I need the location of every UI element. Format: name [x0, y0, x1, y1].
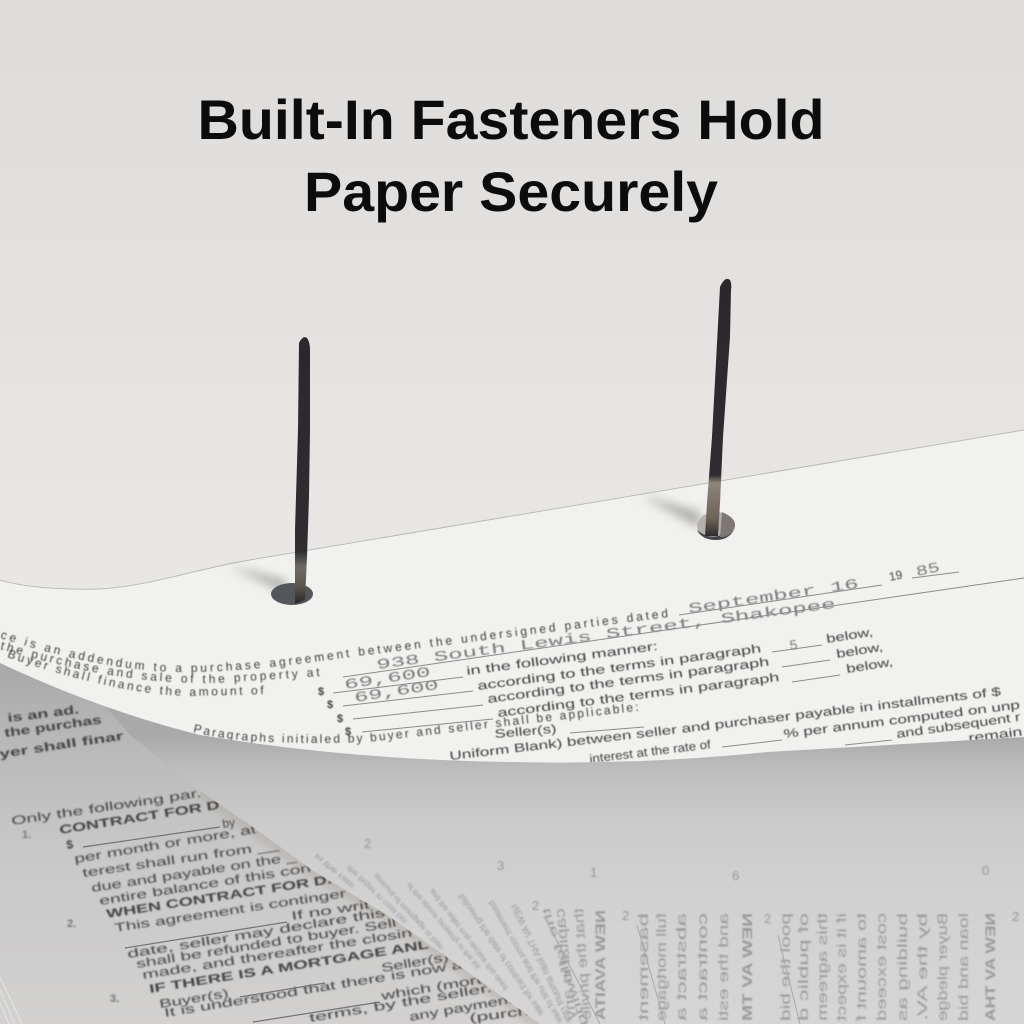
- hole: [271, 583, 313, 605]
- lower left page text: CONTRACT FOR D: [58, 798, 221, 837]
- show-through mirrored text: contract a: [694, 913, 710, 1021]
- printed form text: Seller(s): [494, 722, 557, 741]
- printed form text: the purchase and sale of the property at: [0, 641, 320, 685]
- printed form text: in the following manner:: [466, 639, 659, 678]
- lower left page text: yer shall finar: [0, 729, 125, 761]
- typewriter entries: 85: [915, 560, 942, 581]
- title: Built-In Fasteners Hold: [198, 88, 824, 151]
- show-through mirrored text: following the date of contract for sale: [456, 892, 546, 1018]
- printed form text: ce is an addendum to a purchase agreement between the undersigned parties dated: [0, 608, 668, 675]
- title: Paper Securely: [304, 160, 718, 223]
- show-through mirrored text: in the rate: [313, 851, 357, 891]
- top sheet of paper: [0, 430, 1024, 763]
- fastener right: [640, 279, 735, 540]
- show-through mirrored text: amount of mortgage is loan: [372, 872, 445, 952]
- printed form text: remain: [968, 725, 1023, 745]
- lower left page text: IF THERE IS A MORTGAGE ANL: [148, 937, 430, 996]
- show-through mirrored text: and the seller may declare this deed: [427, 887, 510, 992]
- lower left page text: by: [221, 815, 236, 831]
- lower left page text: Buyer(s): [158, 986, 230, 1011]
- lower left page text: entire balance of this con: [98, 861, 312, 908]
- show-through mirrored text: abstract a: [673, 913, 689, 1021]
- show-through mirrored text: NEW AV TM: [739, 913, 755, 1021]
- show-through mirrored text: [313, 851, 998, 1024]
- show-through page numbers: [364, 836, 1019, 926]
- printed form text: according to the terms in paragraph: [497, 670, 780, 720]
- show-through page numbers: 2: [364, 836, 371, 851]
- lower left page text: WHEN CONTRACT FOR D.: [105, 872, 333, 921]
- curled sheet underside: [0, 640, 1024, 1024]
- typewriter entries: 69,600: [343, 665, 432, 694]
- printed form text: according to the terms in paragraph: [487, 655, 770, 706]
- show-through page numbers: 1: [590, 865, 597, 880]
- show-through page numbers: 0: [982, 863, 989, 878]
- printed form text: Uniform Blank) between seller and purchaser payable in installments of $: [449, 684, 1002, 763]
- show-through mirrored text: of public d: [795, 913, 811, 1021]
- show-through mirrored text: and the esti: [715, 913, 731, 1021]
- lower left page text: It is understood that there is now a: [163, 957, 464, 1020]
- lower left page text: This agreement is continger: [113, 886, 347, 935]
- pin: [295, 337, 310, 604]
- printed form text: $: [337, 713, 343, 725]
- lower left page text: is an ad.: [7, 702, 80, 725]
- show-through mirrored text: building as: [894, 913, 910, 1021]
- lower left page text: 1.: [22, 829, 31, 841]
- show-through mirrored text: of the above property in the lot: [405, 881, 483, 971]
- show-through mirrored text: that the privile: [570, 908, 594, 1021]
- show-through mirrored text: NEW AV THA: [982, 913, 998, 1021]
- show-through mirrored text: cost exceed: [873, 913, 889, 1021]
- show-through mirrored text: pool the bid: [777, 913, 793, 1021]
- form rule lines: [333, 572, 1024, 747]
- rule lines through underside: [545, 918, 800, 1024]
- shadow: [228, 566, 286, 592]
- shadow: [640, 495, 700, 528]
- show-through mirrored text: Buyer pledge: [934, 913, 950, 1021]
- lower left page text: 3.: [110, 993, 119, 1005]
- lower left page text: terest shall run from __: [81, 838, 280, 880]
- show-through mirrored text: full mortgage: [653, 913, 669, 1021]
- printed form text: Paragraphs initialed by buyer and seller shall be applicable:: [193, 703, 638, 746]
- typewriter entries: September 16: [687, 577, 860, 618]
- printed form text: below,: [825, 625, 874, 646]
- page rule lines: [83, 827, 380, 1022]
- printed form text: $: [327, 699, 333, 711]
- show-through mirrored text: NEW AVAITA: [592, 910, 608, 1020]
- show-through page numbers: 2: [532, 898, 539, 913]
- lower left page text: Seller(s): [380, 950, 450, 975]
- printed form text: 19: [888, 567, 904, 584]
- printed form text: according to the terms in paragraph: [477, 641, 762, 693]
- printed form text: below,: [835, 640, 884, 661]
- lower left page text: the purchas: [3, 712, 103, 740]
- show-through page numbers: 6: [732, 868, 739, 883]
- lower left page text: which (mort,: [379, 971, 488, 1003]
- lower left page text: any payment: [408, 992, 515, 1024]
- show-through page numbers: 2: [764, 911, 771, 926]
- show-through mirrored text: the buyer in cost tax: [345, 864, 409, 926]
- lower left page text: date, seller may declare this: [126, 905, 386, 961]
- typewriter entries: 69,600: [353, 678, 440, 707]
- lower left page text: shall be refunded to buyer. Sell: [135, 916, 397, 971]
- show-through mirrored text: basement: [635, 913, 651, 1021]
- show-through mirrored text: by the AV.: [914, 913, 930, 1021]
- show-through mirrored text: to amount f: [853, 913, 869, 1021]
- typewriter entries: 938 South Lewis Street, Shakopee: [376, 597, 837, 674]
- show-through mirrored text: capital in any: [551, 908, 579, 1021]
- printed form text: [0, 562, 1024, 762]
- sheet top edge: [0, 430, 1024, 589]
- title: [198, 88, 824, 223]
- lower left page text: made, and thereafter the closin: [141, 925, 413, 982]
- page corner edges: [0, 977, 22, 1024]
- lower left page text: per month or more, at: [73, 822, 258, 866]
- show-through page numbers: 2: [1012, 909, 1019, 924]
- show-through mirrored text: loan and bid: [955, 913, 971, 1021]
- lower left page text: Only the following par.: [10, 786, 202, 828]
- show-through mirrored text: this agreem: [814, 913, 830, 1021]
- lower left page text: $: [65, 837, 74, 852]
- pin: [705, 279, 731, 536]
- fastener left: [228, 337, 313, 605]
- typewriter entries: [343, 560, 942, 707]
- lower left page text: If no writ: [290, 897, 372, 923]
- lower left page text: [0, 702, 530, 1024]
- printed form text: below,: [845, 655, 894, 676]
- printed form text: $: [318, 686, 324, 698]
- hole: [697, 512, 735, 540]
- lower left page text: 2.: [67, 918, 76, 930]
- printed form text: interest at the rate of: [589, 737, 712, 766]
- lower left page text: due and payable on the _: [90, 849, 298, 895]
- show-through mirrored text: the following: [540, 906, 590, 1024]
- lower left page: [0, 704, 540, 1024]
- show-through page numbers: 3: [497, 858, 504, 873]
- printed form text: and subsequent r: [895, 710, 1021, 741]
- show-through mirrored text: if it is expect: [833, 913, 849, 1021]
- printed form text: % per annum computed on unp: [783, 698, 1021, 741]
- printed form text: Buyer shall finance the amount of: [7, 648, 264, 697]
- typewriter entries: 5: [788, 638, 799, 655]
- show-through page numbers: 2: [622, 908, 629, 923]
- printed form text: $: [345, 726, 351, 738]
